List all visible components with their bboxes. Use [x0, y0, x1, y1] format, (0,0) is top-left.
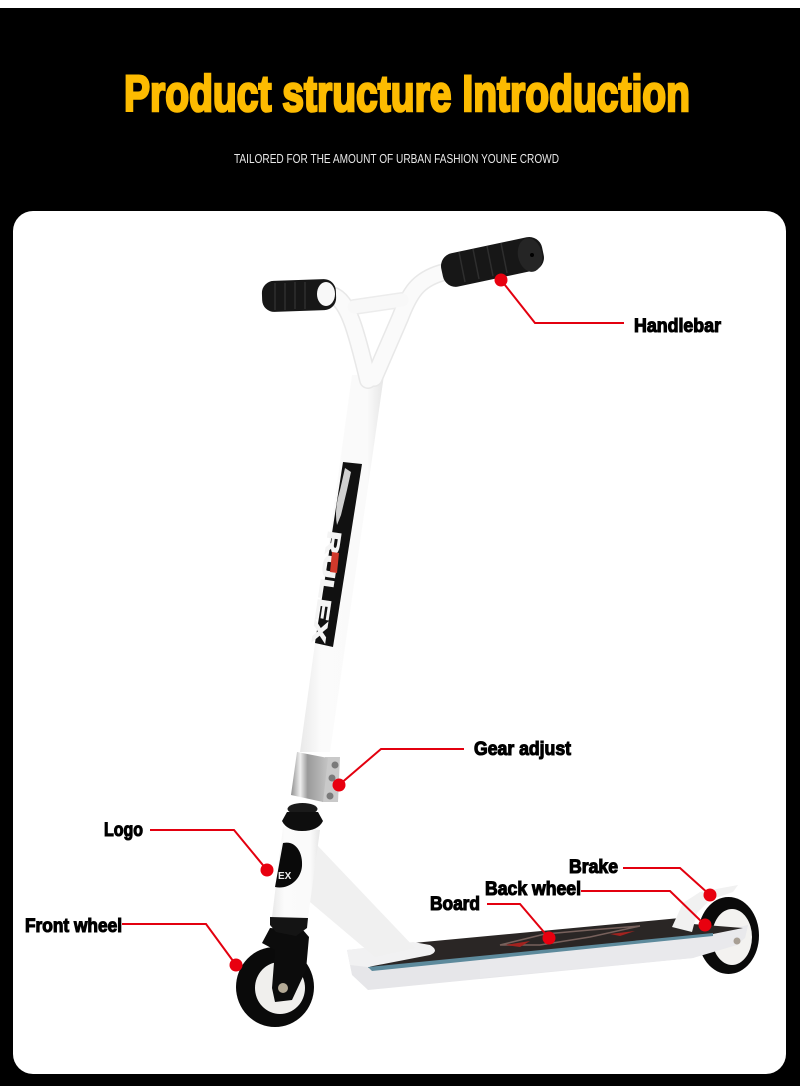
icon: gear clamp — [291, 752, 340, 802]
icon: headset collar — [282, 803, 323, 831]
icon: deck — [347, 918, 748, 990]
icon: stem sticker — [307, 462, 362, 647]
callout: back wheel — [485, 879, 712, 932]
icon: front wheel and fork — [236, 928, 314, 1027]
callout: gear adjust — [332, 739, 572, 792]
callout: front wheel — [25, 916, 242, 972]
icon: handlebar frame — [332, 273, 441, 380]
callout: handlebar — [494, 274, 722, 337]
icon: back wheel — [698, 897, 759, 974]
icon: brake fender — [672, 885, 738, 932]
panel: product diagram — [13, 211, 786, 1074]
icon: stem sticker: RULEX — [307, 529, 344, 645]
callout: gear adjust: Gear adjust — [474, 739, 572, 760]
icon: head tube logo: EX — [278, 871, 292, 882]
callout: brake — [569, 857, 716, 902]
icon: head tube — [272, 827, 320, 918]
icon: left grip — [261, 279, 337, 312]
icon: lower collar — [270, 917, 308, 936]
callout: handlebar: Handlebar — [634, 316, 722, 337]
callout: board: Board — [430, 894, 480, 915]
subtitle: TAILORED FOR THE AMOUNT OF URBAN FASHION YOUNE CROWD — [234, 151, 559, 166]
callout: brake: Brake — [569, 857, 618, 878]
callout: board — [430, 894, 556, 944]
callout: front wheel: Front wheel — [25, 916, 122, 937]
callout: logo: Logo — [104, 820, 143, 841]
scooter illustration — [236, 235, 759, 1027]
callout: logo — [104, 820, 274, 876]
icon: down tube — [310, 845, 415, 957]
icon: head tube logo — [275, 843, 302, 888]
icon: stem — [300, 375, 384, 752]
callout: back wheel: Back wheel — [485, 879, 581, 900]
icon: right grip — [439, 235, 546, 289]
